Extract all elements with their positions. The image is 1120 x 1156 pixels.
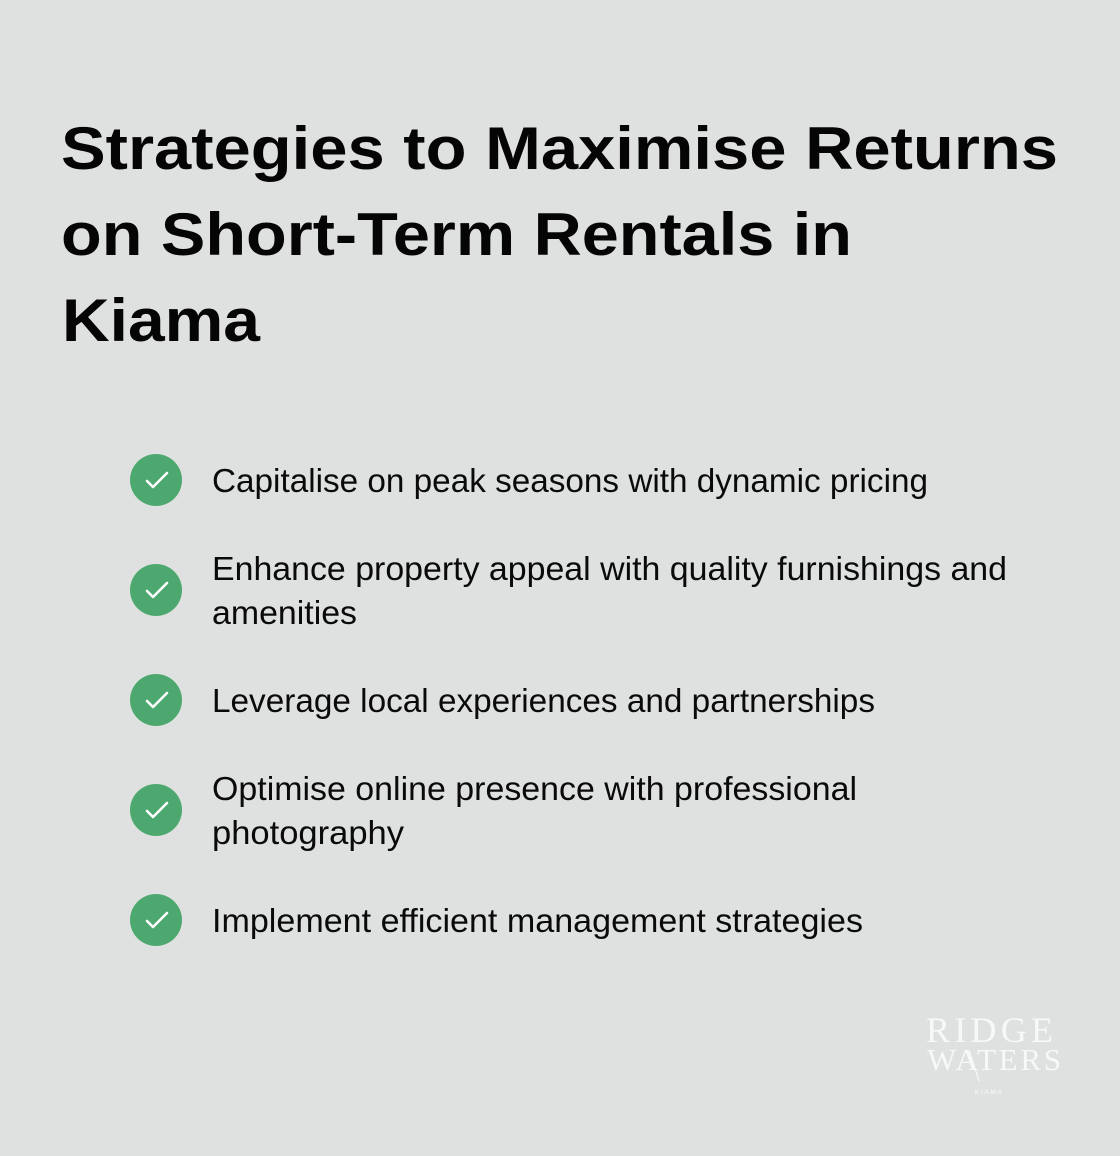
item: online presence [130,771,857,852]
title: Kiama [62,287,261,354]
item: online presence: photography [212,815,404,852]
item: management strategies: Implement efficient management strategies [212,903,863,940]
logo: Ridge Waters Kiama [926,1010,1061,1096]
checklist [130,454,1007,946]
title [61,115,1058,354]
item: dynamic pricing [130,454,928,506]
title: Strategies to Maximise Returns [61,115,1058,182]
item: dynamic pricing: Capitalise on peak seasons with dynamic pricing [212,463,928,500]
item: online presence: Optimise online presence with professional [212,771,857,808]
logo: Ridge Waters Kiama: KIAMA [975,1089,1003,1096]
item: management strategies [130,894,863,946]
item: local experiences [130,674,875,726]
item: furnishings and amenities: Enhance property appeal with quality furnishings and [212,551,1007,588]
logo: Ridge Waters Kiama: RIDGE [926,1010,1053,1050]
logo: Ridge Waters Kiama: WATERS [927,1042,1061,1077]
item: furnishings and amenities [130,551,1007,632]
item: local experiences: Leverage local experiences and partnerships [212,683,875,720]
item: furnishings and amenities: amenities [212,595,357,632]
title: on Short-Term Rentals in [61,201,852,268]
